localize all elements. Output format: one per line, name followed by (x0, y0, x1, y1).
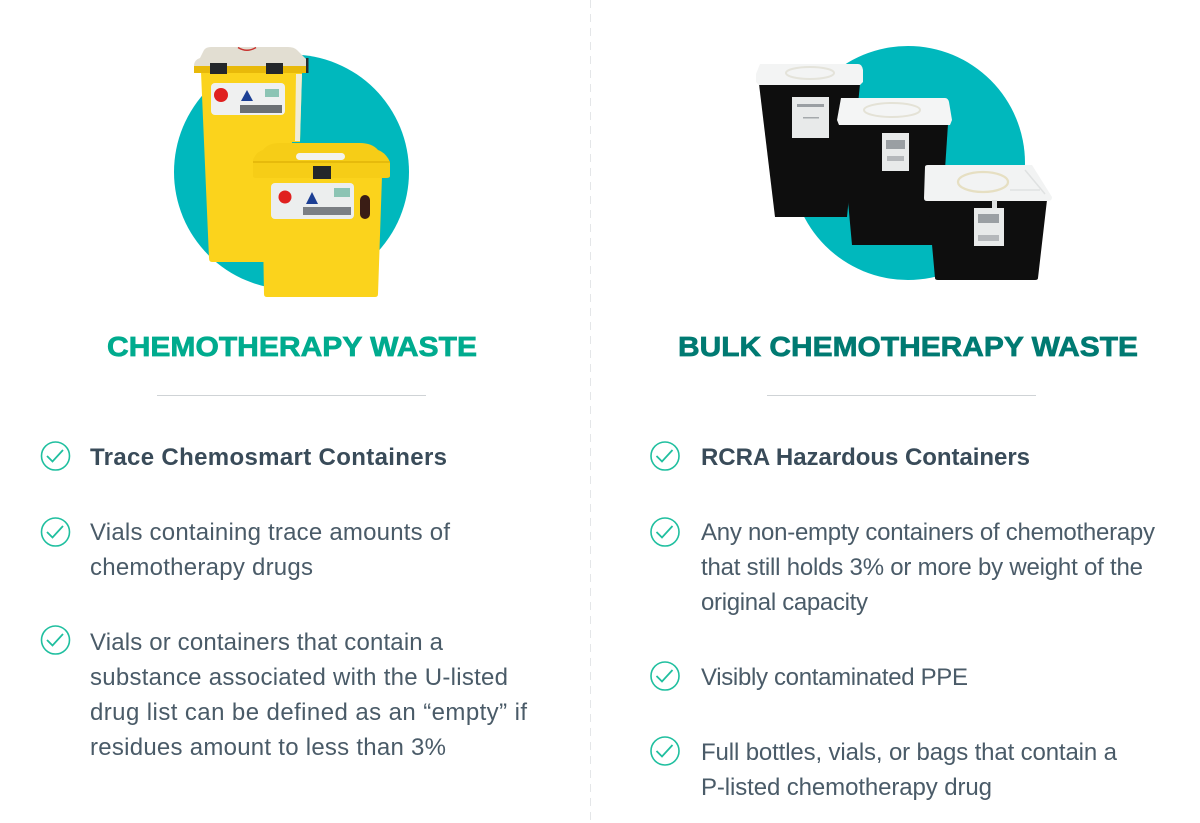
checklist item: P-listed (651, 737, 1118, 801)
checklist item: non-empty containers (651, 518, 1155, 616)
heading rule (767, 394, 1036, 396)
checklist item: RCRA containers (651, 442, 1030, 471)
panel: bulk chemotherapy waste (651, 46, 1155, 801)
check icon (42, 626, 70, 654)
checklist item: PPE (651, 662, 968, 691)
black container large (756, 64, 863, 217)
check icon (42, 518, 70, 546)
item text: Visibly contaminated PPE (701, 664, 968, 691)
teal circle (174, 54, 409, 290)
item text: Trace Chemosmart Containers (90, 444, 447, 471)
check icon (651, 737, 679, 765)
checklist item: trace containers (42, 442, 447, 471)
black container medium (837, 98, 952, 245)
heading: CHEMOTHERAPY WASTE (107, 331, 477, 362)
check icon (651, 442, 679, 470)
item text: drug list can be defined as an “empty” if (90, 699, 527, 726)
black container small (924, 165, 1052, 280)
illustration: black bulk waste containers (756, 46, 1052, 280)
illustration: yellow chemotherapy waste containers (174, 47, 409, 297)
item text: residues amount to less than 3% (90, 734, 446, 761)
check icon (42, 442, 70, 470)
check icon (651, 518, 679, 546)
item text: Vials containing trace amounts of (90, 519, 450, 546)
item text: P-listed chemotherapy drug (701, 774, 992, 801)
heading rule (157, 394, 426, 396)
tall yellow container (194, 47, 308, 262)
item text: Vials or containers that contain a (90, 629, 444, 656)
teal circle (791, 46, 1025, 280)
item text: original capacity (701, 589, 868, 616)
checklist item: trace amounts (42, 518, 450, 581)
item text: that still holds 3% or more by weight of the (701, 554, 1143, 581)
column divider (590, 0, 592, 823)
item text: RCRA Hazardous Containers (701, 444, 1030, 471)
item text: Any non-empty containers of chemotherapy (701, 519, 1155, 546)
checklist item: U-listed (42, 626, 527, 761)
item text: Full bottles, vials, or bags that contain a (701, 739, 1118, 766)
item text: chemotherapy drugs (90, 554, 313, 581)
short yellow container (253, 143, 390, 297)
check icon (651, 662, 679, 690)
heading: BULK CHEMOTHERAPY WASTE (678, 331, 1138, 362)
item text: substance associated with the U-listed (90, 664, 508, 691)
panel: chemotherapy waste (42, 47, 527, 761)
